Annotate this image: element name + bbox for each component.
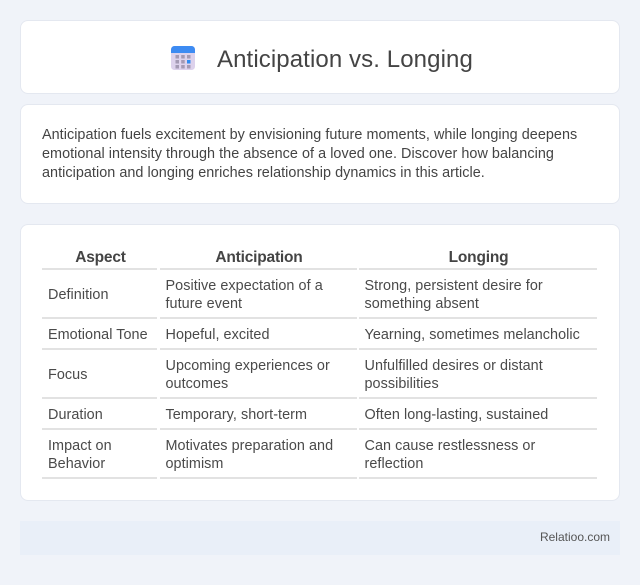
intro card: [20, 104, 620, 204]
row: duration: Often long-lasting, sustained: [364, 407, 548, 423]
row: emotional tone: Hopeful, excited: [166, 327, 270, 343]
row: definition: Definition: [48, 287, 108, 303]
row: impact on behavior: optimism: [166, 456, 223, 472]
row: focus: Unfulfilled desires or distant: [364, 358, 543, 374]
row: definition: [48, 278, 543, 312]
row: impact on behavior: Impact on: [48, 438, 112, 454]
intro text: Anticipation fuels excitement by envisioning future moments, while longing deepens: [42, 127, 577, 143]
row: impact on behavior: [48, 438, 536, 472]
row: focus: Focus: [48, 367, 87, 383]
row: focus: possibilities: [364, 376, 439, 392]
table header: Aspect: [75, 249, 126, 266]
row: definition: Positive expectation of a: [166, 278, 323, 294]
intro text: emotional intensity through the absence of a loved one. Discover how balancing: [42, 146, 554, 162]
title: Anticipation vs. Longing: [217, 46, 473, 73]
row: duration: Duration: [48, 407, 103, 423]
table card: [20, 224, 620, 501]
row: emotional tone: Emotional Tone: [48, 327, 148, 343]
row: duration: Temporary, short-term: [166, 407, 307, 423]
icon: calendar: [171, 46, 195, 70]
row: emotional tone: Yearning, sometimes melancholic: [364, 327, 580, 343]
row: impact on behavior: Motivates preparation and: [166, 438, 333, 454]
table header: Longing: [449, 249, 508, 266]
row: focus: Upcoming experiences or: [166, 358, 330, 374]
row: definition: future event: [166, 296, 242, 312]
table header: Anticipation: [215, 249, 303, 266]
footer bar: [20, 521, 620, 555]
row: emotional tone: [48, 327, 580, 343]
row: duration: [48, 407, 548, 423]
row: focus: [48, 358, 543, 392]
table header: [75, 249, 508, 266]
footer credit: Relatioo.com: [540, 530, 610, 544]
row: definition: something absent: [364, 296, 479, 312]
comparison table: [42, 249, 597, 479]
row: impact on behavior: reflection: [364, 456, 423, 472]
title card: [20, 20, 620, 94]
row: definition: Strong, persistent desire for: [364, 278, 543, 294]
intro text: anticipation and longing enriches relationship dynamics in this article.: [42, 165, 485, 181]
intro text: [42, 127, 577, 181]
row: impact on behavior: Can cause restlessness or: [364, 438, 535, 454]
row: impact on behavior: Behavior: [48, 456, 105, 472]
row: focus: outcomes: [166, 376, 228, 392]
